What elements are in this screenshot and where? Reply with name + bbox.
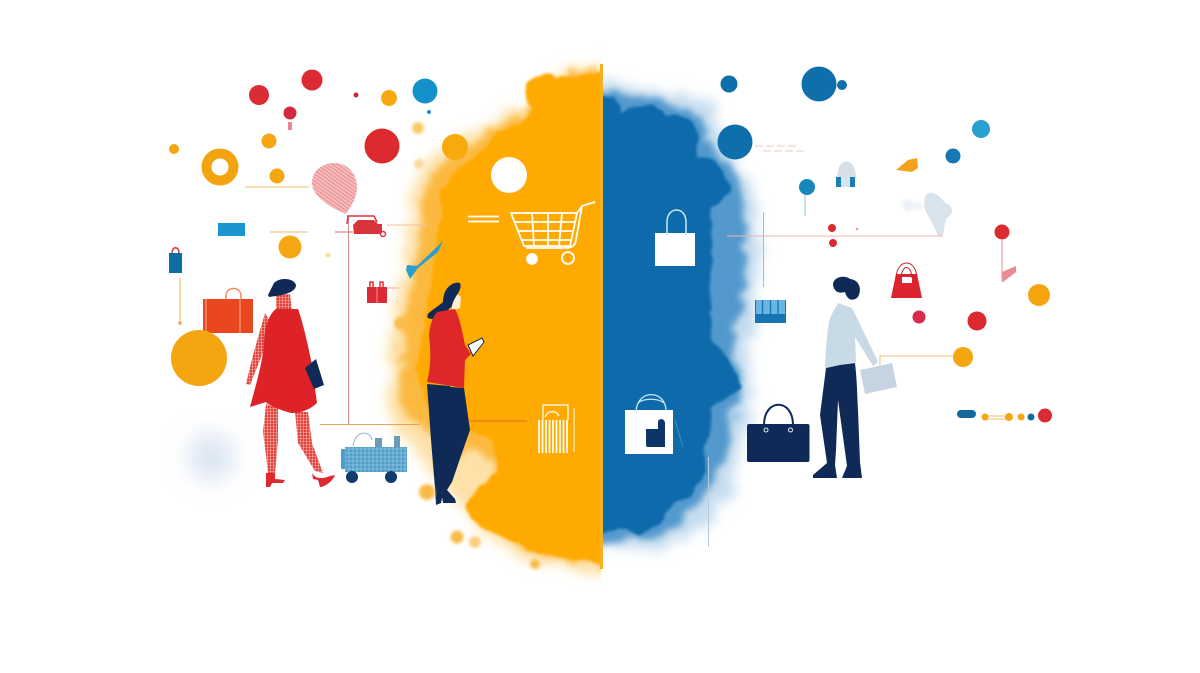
icon: white striped gift bag [539, 405, 574, 453]
blue pin [799, 179, 815, 216]
figure: woman with phone [427, 283, 484, 505]
figure: woman with tablet [813, 277, 897, 478]
icon: orange donut [206, 154, 234, 180]
connector lines right [708, 212, 1002, 547]
ponytail and hair [427, 283, 461, 319]
icon: blue shopping trolley [341, 433, 407, 483]
hair [833, 277, 860, 300]
blue bubbles top right [718, 66, 990, 164]
right arm [294, 312, 312, 366]
icon: red handbag [891, 263, 922, 298]
illustration: two sides of shopping [169, 57, 1052, 582]
hair and hat [268, 279, 296, 297]
trousers [813, 363, 862, 478]
handbag [305, 359, 324, 389]
blue bubble top [412, 78, 438, 114]
figure: woman in red dress [246, 279, 335, 487]
icon: dome hat [836, 162, 856, 187]
icon: white shopping cart [468, 202, 595, 264]
center divider [600, 64, 603, 569]
dress [250, 309, 317, 413]
dashed faint lines [755, 146, 806, 151]
orange bubbles cluster [169, 90, 468, 258]
orange large circle [171, 330, 227, 386]
legs [427, 384, 470, 505]
icon: blue checkmark [406, 241, 443, 279]
icon: orange shopping bag [203, 288, 253, 333]
top [427, 309, 471, 388]
pale cloud shape [902, 193, 952, 236]
panel: blue half wash [590, 84, 758, 550]
face [452, 290, 461, 311]
icon: white bag with thumb [625, 395, 683, 454]
blouse [825, 303, 878, 368]
pale blue smudge [187, 433, 235, 481]
icon: navy handbag [747, 405, 810, 462]
boots [266, 473, 335, 487]
connector lines left [180, 187, 427, 424]
legs [263, 404, 323, 474]
phone [468, 338, 484, 356]
icon: small blue bag [169, 248, 182, 325]
neck [276, 294, 292, 312]
icon: striped blue bag [755, 300, 786, 323]
panel: orange half wash [388, 60, 612, 574]
icon: orange leaf [896, 158, 918, 172]
orange splashes [394, 317, 540, 569]
red dots right [828, 224, 1016, 330]
icon: red car [347, 216, 386, 236]
progress row of dots [957, 408, 1052, 422]
orange dots right [953, 284, 1050, 367]
red bubbles cluster [249, 70, 400, 164]
icon: balloon [312, 163, 357, 214]
tablet [860, 363, 897, 394]
icon: small red bag [367, 282, 387, 303]
icon: white shopping bag [655, 210, 695, 266]
connector to gift bag [470, 420, 527, 422]
icon: blue tag [218, 223, 245, 236]
left arm [246, 313, 272, 385]
icon: white circle [491, 157, 527, 193]
